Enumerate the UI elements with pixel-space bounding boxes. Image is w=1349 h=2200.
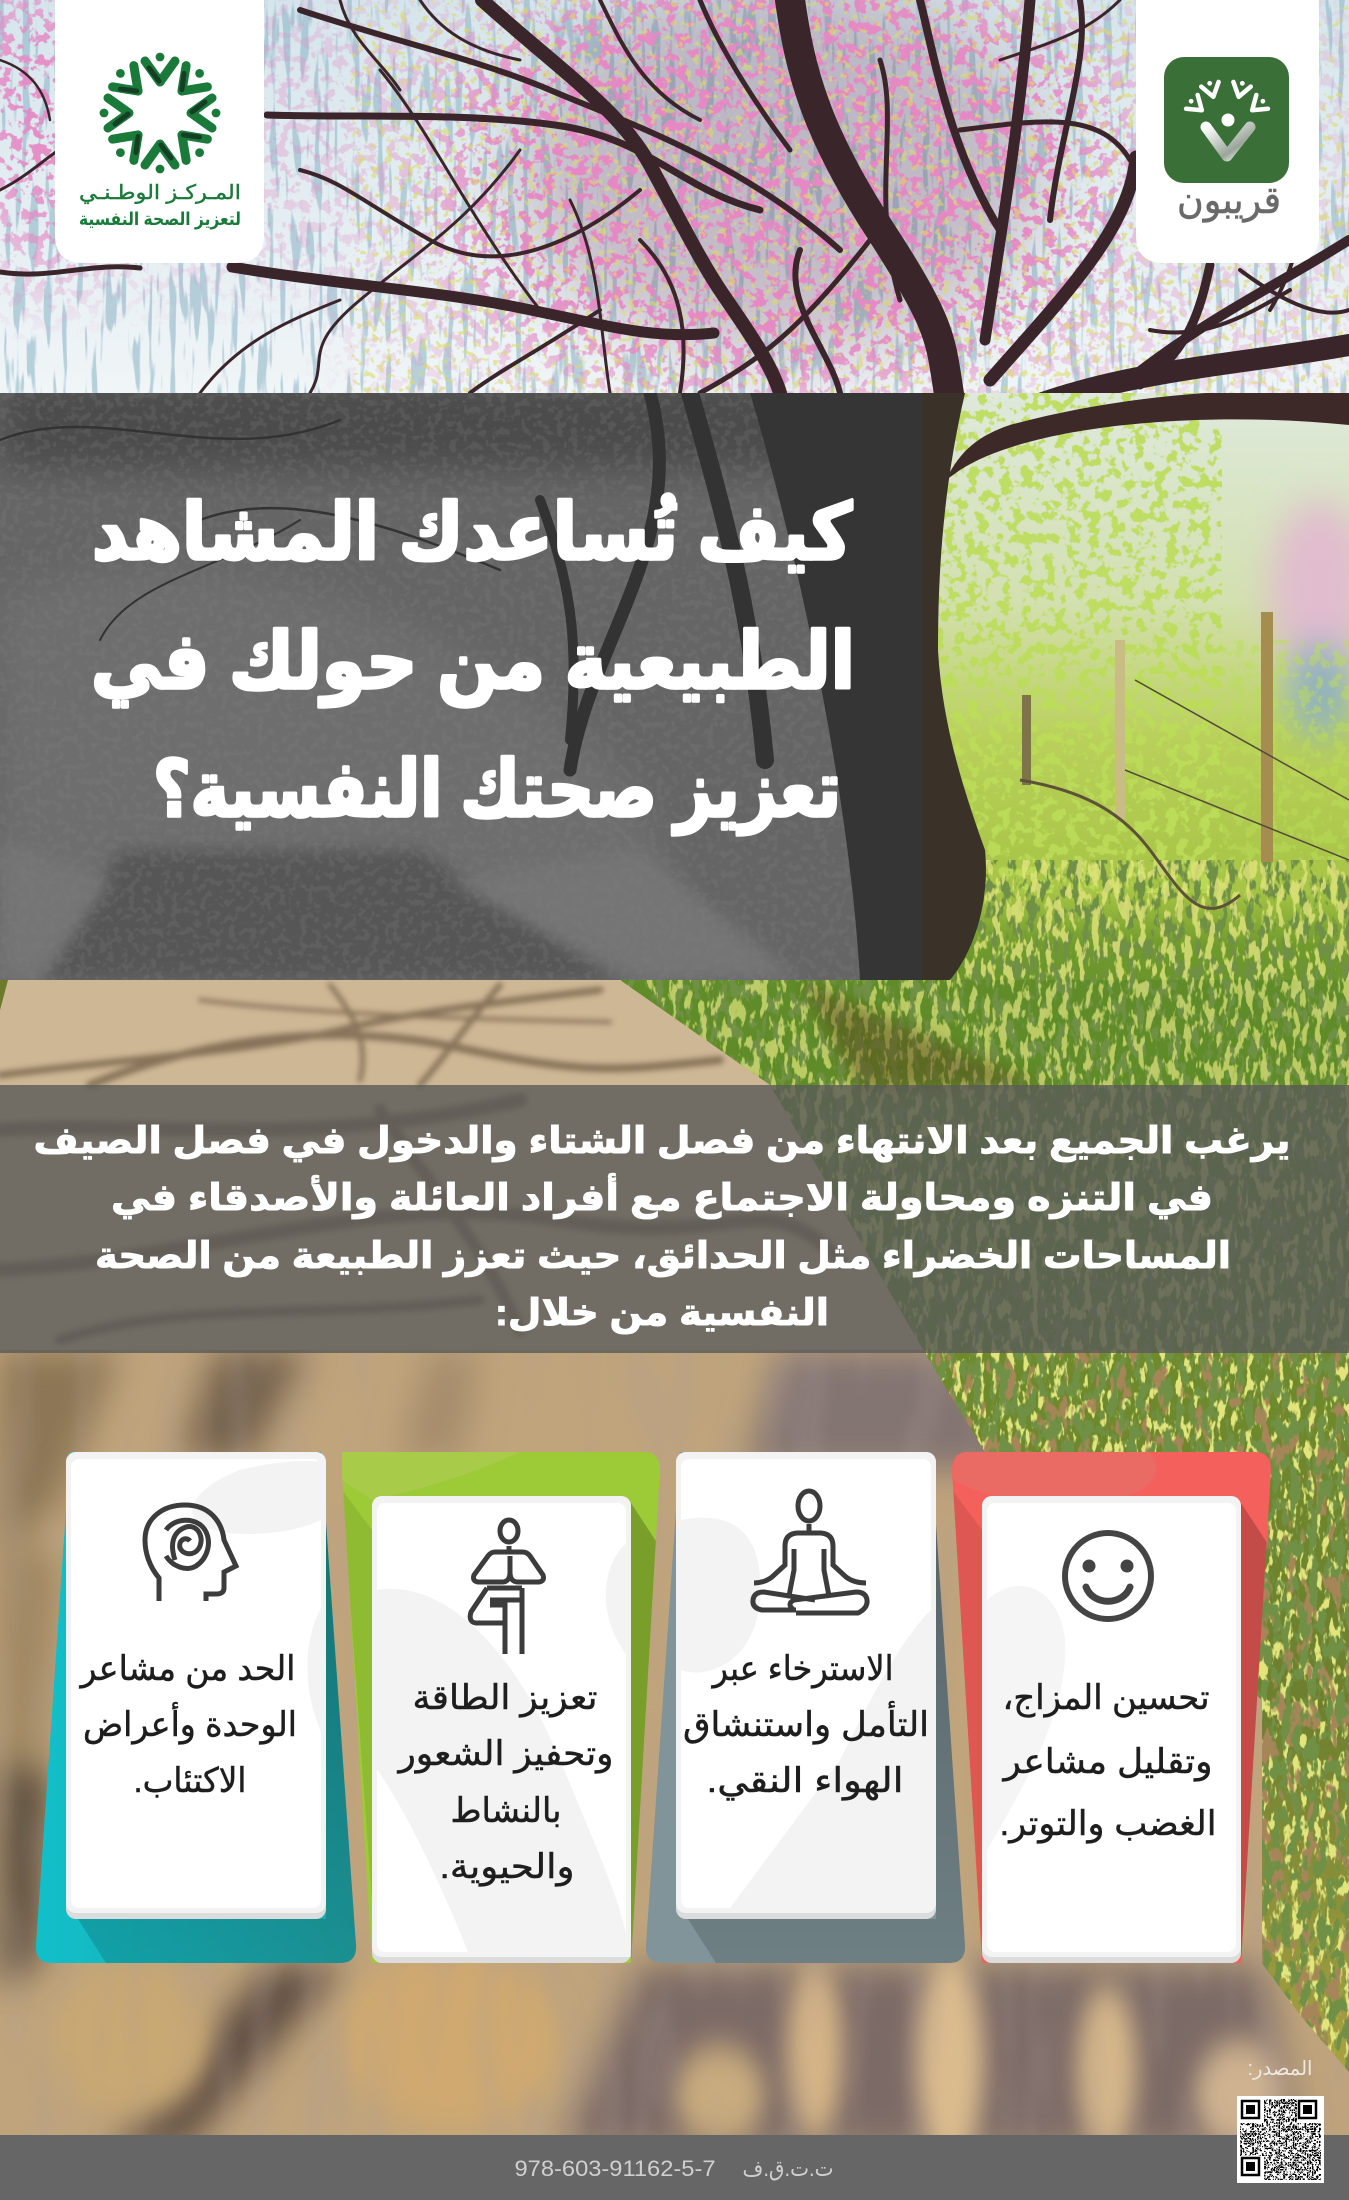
text: improving mood: تحسين المزاج، [1002, 1679, 1210, 1718]
text: boosting energy [396, 1679, 614, 1887]
title: تعزيز صحتك النفسية؟ [153, 745, 841, 835]
title: الطبيعية من حولك في [91, 617, 855, 707]
text: boosting energy: بالنشاط [450, 1792, 562, 1830]
text: boosting energy: والحيوية. [440, 1848, 574, 1887]
grass beside the road under the title [600, 980, 1349, 1353]
logo panel: national center: المـركـز الوطـنـي [79, 182, 241, 205]
title: كيف تُساعدك المشاهد [92, 488, 853, 576]
text: improving mood [1000, 1679, 1216, 1844]
icon: head with spiral [145, 1505, 236, 1601]
text: improving mood: وتقليل مشاعر [1001, 1743, 1212, 1782]
sky and blossoming branches [0, 0, 1349, 420]
icon: Qareeboon app tile [1164, 57, 1289, 183]
text: reducing loneliness: الوحدة وأعراض [83, 1702, 297, 1745]
text: reducing loneliness: الاكتئاب. [134, 1762, 246, 1800]
footer bar: ت.ت.ق.ف [742, 2156, 834, 2181]
source label: المصدر: [1248, 2058, 1312, 2080]
intro text band: النفسية من خلال: [495, 1292, 829, 1334]
text: relaxation [683, 1650, 929, 1801]
footer bar [0, 2135, 1349, 2200]
title [91, 488, 855, 835]
text: improving mood: الغضب والتوتر. [1000, 1805, 1216, 1844]
icon: tree pose figure [470, 1520, 544, 1654]
icon: meditating figure [753, 1491, 867, 1613]
right-hand foliage and meadow [922, 393, 1349, 980]
dark title panel [0, 380, 922, 980]
panel: card 2 boosting energy [342, 1452, 665, 1963]
logo panel: national center: لتعزيز الصحة النفسية [79, 209, 241, 230]
text: reducing loneliness [79, 1650, 297, 1800]
intro text band: يرغب الجميع بعد الانتهاء من فصل الشتاء والدخول في فصل الصيف [34, 1120, 1290, 1162]
text: boosting energy: تعزيز الطاقة [412, 1679, 598, 1718]
logo panel: Qareeboon: قريبون [1177, 180, 1281, 223]
QR code [1237, 2096, 1324, 2183]
road below the title [0, 980, 925, 1353]
panel: card 4 improving mood [952, 1452, 1275, 1963]
lower road with blurred shadows [0, 1350, 1349, 2170]
text: boosting energy: وتحفيز الشعور [396, 1735, 614, 1774]
panel: card 3 relaxation [646, 1452, 970, 1963]
grass at the right edge of the road [923, 1350, 1349, 2075]
intro text band [0, 1085, 1349, 1353]
logo panel: national center [55, 0, 264, 263]
icon: smiling face [1065, 1533, 1151, 1619]
panel: card 1 reducing loneliness [36, 1452, 360, 1963]
text: relaxation: الاسترخاء عبر [711, 1650, 894, 1689]
text: relaxation: الهواء النقي. [706, 1762, 904, 1801]
logo panel: Qareeboon [1136, 0, 1319, 263]
footer bar: 978-603-91162-5-7 [514, 2156, 716, 2181]
text: reducing loneliness: الحد من مشاعر [79, 1650, 296, 1689]
icon: national center emblem [100, 53, 220, 173]
intro text band: المساحات الخضراء مثل الحدائق، حيث تعزز الطبيعة من الصحة [95, 1235, 1231, 1277]
intro text band: في التنزه ومحاولة الاجتماع مع أفراد العائلة والأصدقاء في [111, 1173, 1213, 1219]
text: relaxation: التأمل واستنشاق [683, 1701, 929, 1745]
